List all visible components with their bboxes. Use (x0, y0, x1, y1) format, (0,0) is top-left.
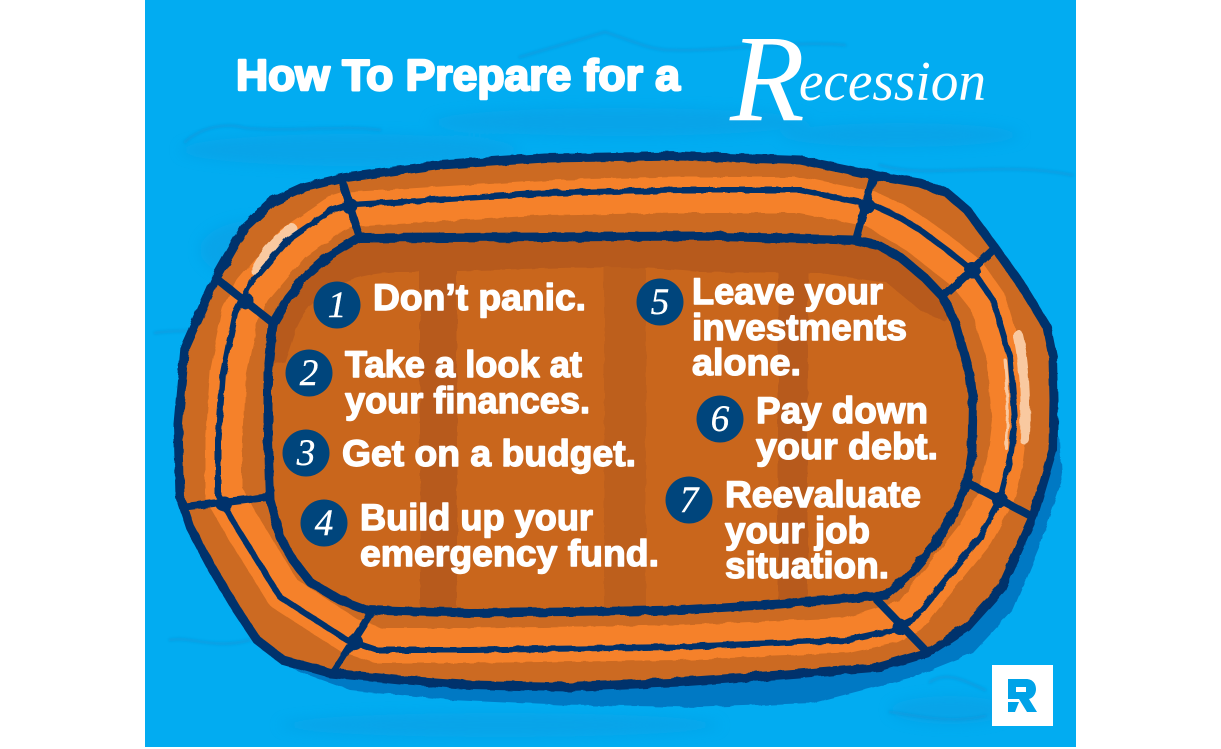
water shading (180, 108, 1020, 737)
step 2: 2 (300, 353, 318, 394)
title: script word: ecession (799, 51, 986, 113)
step 1: Don’t panic. (373, 277, 586, 318)
step 1 (314, 277, 586, 328)
step 4: emergency fund. (360, 533, 659, 574)
title: script word: R (729, 10, 805, 147)
logo mark: R (1008, 679, 1037, 712)
floor base (268, 236, 973, 613)
step 5 (636, 271, 907, 383)
step 7: your job (725, 510, 870, 551)
tube highlight band: outer (218, 190, 1015, 650)
step 5: Leave your (692, 271, 883, 312)
step 6: your debt. (756, 426, 938, 467)
step 4: 4 (315, 503, 333, 544)
tube glare (256, 229, 1025, 448)
logo (992, 665, 1053, 726)
cross straps (185, 178, 1033, 673)
infographic canvas (145, 0, 1076, 747)
step 6: 6 (711, 399, 730, 440)
tube highlight band: inner (232, 203, 1002, 638)
step 5: 5 (651, 282, 669, 323)
step 4 (300, 497, 659, 574)
panel: water background (145, 0, 1076, 747)
title (236, 10, 986, 147)
floor shading (262, 230, 960, 612)
step 3: 3 (296, 433, 315, 474)
step 5: alone. (692, 342, 801, 383)
raft floor (262, 230, 973, 613)
step 3: Get on a budget. (342, 433, 636, 474)
step 7: Reevaluate (725, 474, 921, 515)
step 2 (286, 344, 590, 421)
raft drop shadow (262, 300, 1062, 707)
step 4: Build up your (360, 497, 593, 538)
rope knots (216, 198, 1008, 650)
life raft (178, 156, 1054, 687)
step 7 (666, 474, 921, 586)
title: plain text: How To Prepare for a (236, 51, 681, 100)
step 6 (696, 390, 938, 467)
step 7: 7 (680, 480, 700, 521)
water ripples (155, 32, 1072, 719)
raft outer tube (178, 156, 1054, 687)
step 2: Take a look at (345, 344, 582, 385)
raft floor outline (268, 236, 973, 613)
step 7: situation. (725, 545, 889, 586)
step 2: your finances. (345, 380, 590, 421)
step 6: Pay down (756, 390, 928, 431)
rope (218, 190, 1015, 650)
step 1: 1 (328, 285, 346, 326)
step 5: investments (692, 307, 907, 348)
